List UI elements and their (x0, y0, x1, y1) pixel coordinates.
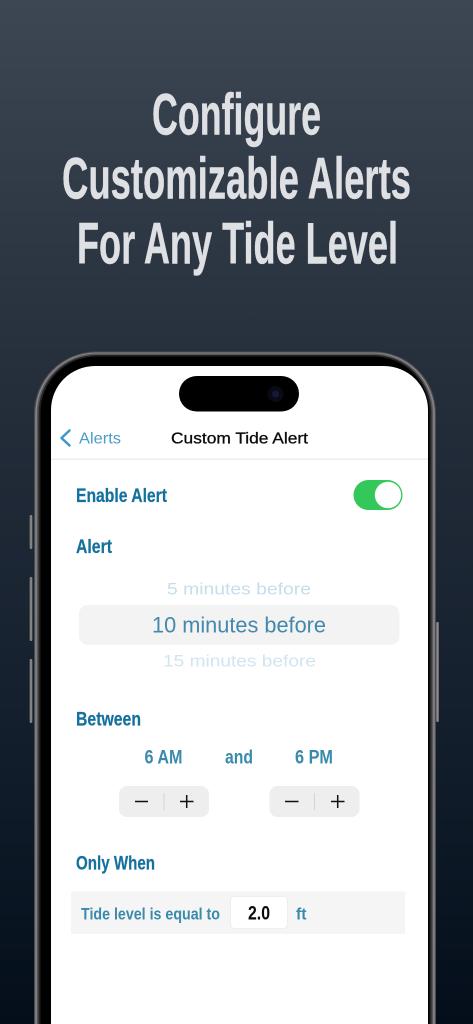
time range labels: 6 AM (144, 748, 182, 768)
picker option: 15 minutes before: 15 minutes before (163, 652, 316, 670)
tide level label: Tide level is equal to (81, 904, 220, 924)
tide level input: 2.0 (248, 904, 270, 924)
time range labels (144, 748, 333, 768)
heading: Only When: Only When (76, 854, 155, 874)
title (62, 82, 411, 276)
picker selected: 10 minutes before: 10 minutes before (152, 612, 326, 638)
time range labels: 6 PM (295, 748, 333, 768)
time range labels: and (225, 748, 253, 768)
dynamic island (179, 376, 299, 412)
phone screen (51, 366, 428, 1024)
picker option: 5 minutes before: 5 minutes before (167, 580, 311, 598)
nav divider (51, 458, 428, 460)
heading: Alert: Alert (76, 537, 113, 558)
selected row highlight (79, 605, 400, 645)
nav title: Custom Tide Alert (171, 430, 309, 448)
nav back: Alerts: Alerts (79, 430, 121, 448)
stepper: end time (270, 786, 360, 817)
tide level unit: ft (296, 904, 307, 924)
nav back: Alerts (62, 430, 121, 448)
alert time picker (79, 580, 400, 670)
toggle switch (354, 480, 402, 510)
heading: Between: Between (76, 710, 141, 730)
tide level input (230, 896, 288, 928)
phone side buttons (30, 515, 439, 723)
title: Configure (152, 82, 321, 148)
heading: Enable Alert: Enable Alert (76, 486, 168, 507)
phone frame (34, 352, 436, 1024)
stepper: start time (119, 786, 209, 817)
tide level row (71, 892, 405, 934)
